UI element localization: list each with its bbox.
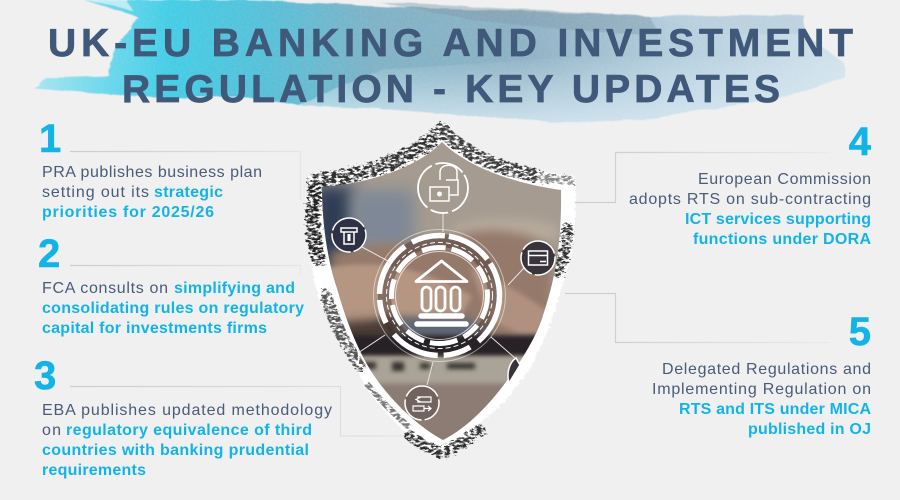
- item 3: 3: [34, 354, 56, 398]
- item 3: on: [42, 422, 61, 439]
- item 4: [629, 120, 872, 248]
- shield photo of hands on keyboard: [322, 142, 562, 440]
- title: REGULATION - KEY UPDATES: [122, 68, 780, 111]
- item 1: setting out its: [42, 184, 149, 201]
- shield: [307, 122, 576, 456]
- item 2: capital for investments firms: [42, 320, 267, 337]
- icon: bank: [416, 261, 467, 324]
- shield white border: [307, 122, 576, 456]
- connector line: item 5: [565, 294, 830, 342]
- shield scratched dark edge: [313, 130, 570, 453]
- item 1: [39, 117, 262, 221]
- item 1: strategic: [154, 184, 223, 201]
- partial circle: lower right: [508, 358, 520, 383]
- item 2: FCA consults on: [42, 280, 168, 297]
- item 2: [38, 232, 304, 337]
- item 5: [652, 310, 871, 438]
- item 3: EBA publishes updated methodology: [42, 402, 332, 419]
- item 2: 2: [38, 232, 60, 276]
- icon: padlock and banknote: [418, 163, 468, 213]
- item 5: RTS and ITS under MICA: [679, 401, 871, 418]
- item 2: simplifying and: [174, 280, 295, 297]
- title: UK-EU BANKING AND INVESTMENT: [48, 22, 853, 65]
- title: [48, 22, 853, 111]
- item 2: consolidating rules on regulatory: [42, 300, 304, 317]
- connector line: item 2: [70, 266, 300, 275]
- item 1: priorities for 2025/26: [42, 204, 214, 221]
- item 5: Implementing Regulation on: [652, 381, 871, 398]
- item 4: 4: [849, 120, 872, 164]
- icon: cash machine: [332, 218, 366, 252]
- item 3: requirements: [42, 462, 146, 479]
- item 4: European Commission: [698, 171, 871, 188]
- partial circle: lower left: [349, 340, 359, 364]
- central ring: [374, 230, 506, 362]
- item 5: published in OJ: [748, 421, 871, 438]
- item 3: [34, 354, 332, 479]
- item 4: adopts RTS on sub-contracting: [629, 191, 871, 208]
- connector line: item 1: [70, 152, 300, 200]
- item 3: countries with banking prudential: [42, 442, 309, 459]
- icon: bank card: [521, 241, 555, 275]
- watercolour brush stroke behind title: [34, 0, 844, 123]
- item 3: regulatory equivalence of third: [66, 422, 312, 439]
- item 4: functions under DORA: [693, 231, 871, 248]
- item 1: 1: [39, 117, 61, 161]
- connector line: item 4: [575, 152, 830, 202]
- item 5: Delegated Regulations and: [662, 361, 871, 378]
- item 5: 5: [849, 310, 871, 354]
- connector line: item 3: [70, 386, 420, 436]
- item 4: ICT services supporting: [685, 211, 871, 228]
- item 1: PRA publishes business plan: [42, 164, 262, 181]
- icon: data transfer: [405, 386, 439, 420]
- spokes: [358, 213, 524, 385]
